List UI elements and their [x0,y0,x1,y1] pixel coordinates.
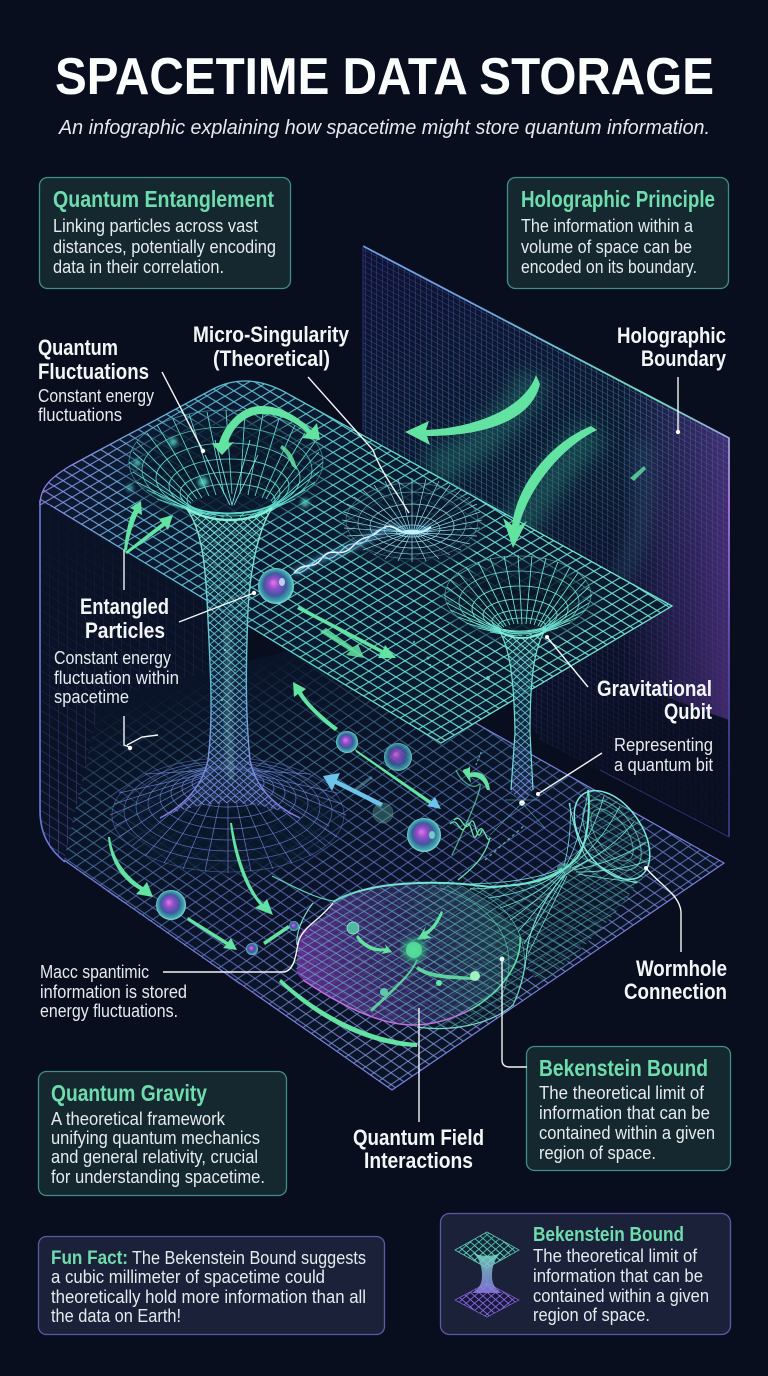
label: quantum fluctuations [38,335,154,425]
label: quantum fluctuations: Quantum [38,335,118,360]
panel: left wall fold [40,500,240,985]
arrow: particle to particle [187,917,237,950]
panel: fun fact: a cubic millimeter of spacetime could [51,1267,325,1287]
panel: bekenstein bound legend: contained within a given [533,1286,709,1306]
arrow: curved long [230,823,273,915]
panel: holographic boundary plane [363,246,729,837]
label: micro-singularity [193,322,350,371]
icon: mini wormhole [455,1232,519,1317]
label: holographic boundary [617,323,727,371]
label: wormhole connection: Connection [624,979,727,1004]
panel: bekenstein bound callout: information that can be [539,1103,710,1123]
arrow: double arc over funnel [212,406,320,455]
title: SPACETIME DATA STORAGE [55,48,714,106]
panel: quantum gravity: A theoretical framework [51,1109,226,1129]
panel: holographic principle [508,178,728,288]
panel: quantum entanglement: Linking particles across vast [53,216,258,236]
label: holographic boundary: Boundary [641,346,727,371]
glowing field sparks [127,438,309,507]
entangled particle main [258,568,294,604]
wormhole throat fan [450,790,650,954]
lightning: entanglement bolt [294,526,431,573]
panel: holographic principle: volume of space can be [521,237,692,257]
leader: gravitational qubit [545,635,588,687]
panel: holographic principle: The information within a [521,216,694,236]
arrow: short link [263,925,290,945]
subtitle: An infographic explaining how spacetime might store quantum information. [58,117,710,139]
text: representing a quantum bit [614,735,713,775]
label: wormhole connection [624,956,727,1004]
leader: entangled particles [124,550,256,750]
big funnel neck [160,508,300,818]
panel: bekenstein bound legend [440,1214,730,1334]
label: wormhole connection: Wormhole [636,956,727,981]
qubit funnel neck [490,632,545,835]
label: entangled particles [80,594,169,643]
arrow: diagonal long [297,606,396,658]
label: holographic boundary: Holographic [617,323,726,348]
text: representing a quantum bit: a quantum bit [614,755,713,775]
arrow: small arc [280,445,297,470]
panel: bekenstein bound legend: Bekenstein Bound [533,1224,684,1246]
panel: bekenstein bound callout: The theoretical limit of [539,1083,705,1103]
leader: macroscopic note [163,903,333,972]
arrow: squiggle [463,766,490,790]
wormhole connection surface [272,777,665,1029]
particle pair ghost [373,803,393,823]
panel: bekenstein bound callout: contained within a given [539,1123,715,1143]
panel: bekenstein bound legend: information that can be [533,1266,703,1286]
panel: bekenstein bound callout: region of space. [539,1143,656,1163]
label: gravitational qubit: Qubit [664,699,713,724]
panel: quantum entanglement: distances, potentially encoding [53,237,276,257]
panel: fun fact: theoretically hold more information than all [51,1287,366,1307]
label: micro-singularity: (Theoretical) [213,346,330,371]
arrow: plane arrow upper [405,375,540,445]
arrow: plane arrow lower [503,426,597,548]
icon: squiggle waves [450,750,525,880]
arrow: left rising arrow 1 [124,501,142,550]
panel: quantum gravity: for understanding spacetime. [51,1167,265,1187]
label: quantum field interactions [353,1125,484,1173]
arrow: entangled line [355,749,437,808]
leader: holographic boundary [676,377,680,434]
panel: quantum gravity: and general relativity, crucial [51,1147,258,1167]
arrow: left rising arrow 2 [125,515,173,554]
panel: bekenstein bound legend: region of space. [533,1305,650,1325]
leader: representing [536,753,602,796]
panel: lower spacetime sheet [64,640,724,1090]
panel: fun fact: the data on Earth! [51,1306,181,1326]
label: entangled particles: Particles [85,618,165,643]
panel: bekenstein bound legend: The theoretical limit of [533,1246,698,1266]
label: quantum field interactions: Quantum Field [353,1125,484,1150]
icon: small dash on plane [630,466,646,481]
panel: quantum entanglement [40,178,290,288]
leader: quantum field [418,1008,420,1122]
arrows: green flow arrows [108,375,597,1047]
particle lower big [407,818,441,852]
particle lower-left [156,890,186,920]
big funnel dimple [114,402,338,526]
text: constant energy fluctuation: fluctuation within [54,668,179,688]
leader: bekenstein bound [500,956,527,1067]
text: constant energy fluctuation [54,648,179,707]
panel: fun fact: Fun Fact: [51,1248,128,1269]
panel: bekenstein bound callout: Bekenstein Bound [539,1055,708,1081]
panel: holographic principle: encoded on its boundary. [521,257,697,277]
label: quantum field interactions: Interactions [364,1148,473,1173]
label: quantum fluctuations: Fluctuations [38,359,149,384]
panel: quantum entanglement: data in their correlation. [53,257,224,277]
text: constant energy fluctuation: spacetime [54,687,129,707]
text: macroscopic information note [40,962,187,1021]
arrow: curved lower-left [108,837,153,897]
arrow: pointing up left [293,682,338,731]
text: constant energy fluctuation: Constant energy [54,648,171,668]
text: macroscopic information note: Macc spantimic [40,962,149,982]
text: macroscopic information note: information is stored [40,982,187,1002]
purple bound region [297,881,521,1025]
arrow: inner wormhole arrows [417,911,443,940]
micro-singularity dimple [334,474,490,570]
panel: quantum gravity: unifying quantum mechanics [51,1128,260,1148]
particles: quantum spheres [156,568,490,996]
arrow: diagonal short thick [320,628,364,658]
panel: quantum entanglement: Quantum Entanglement [53,186,274,212]
drifting sparks [221,641,490,701]
label: quantum fluctuations: Constant energy [38,386,154,406]
leader: wormhole [644,866,681,952]
label: micro-singularity: Micro-Singularity [193,322,350,347]
leader: micro-singularity [308,377,409,513]
text: macroscopic information note: energy fluctuations. [40,1001,178,1021]
panel: quantum gravity [38,1072,286,1196]
arrow: bottom sweep [279,979,417,1047]
panel: bekenstein bound callout [526,1046,730,1170]
lower dimple [104,753,352,877]
panel: quantum gravity: Quantum Gravity [51,1080,207,1106]
panel: top spacetime sheet [40,381,672,743]
particle pair top [336,731,358,753]
leader: quantum fluctuations [162,372,205,453]
small particles [246,943,258,955]
gravitational qubit dimple [432,548,604,644]
label: gravitational qubit: Gravitational [597,676,712,701]
label: quantum fluctuations: fluctuations [38,405,122,425]
label: entangled particles: Entangled [80,594,169,619]
label: gravitational qubit [597,676,713,724]
panel: fun fact [38,1236,384,1334]
text: representing a quantum bit: Representing [614,735,713,755]
panel: holographic principle: Holographic Principle [521,186,715,212]
arrow: blue double arrow [323,773,441,809]
panel: fun fact: The Bekenstein Bound suggests [132,1248,366,1268]
